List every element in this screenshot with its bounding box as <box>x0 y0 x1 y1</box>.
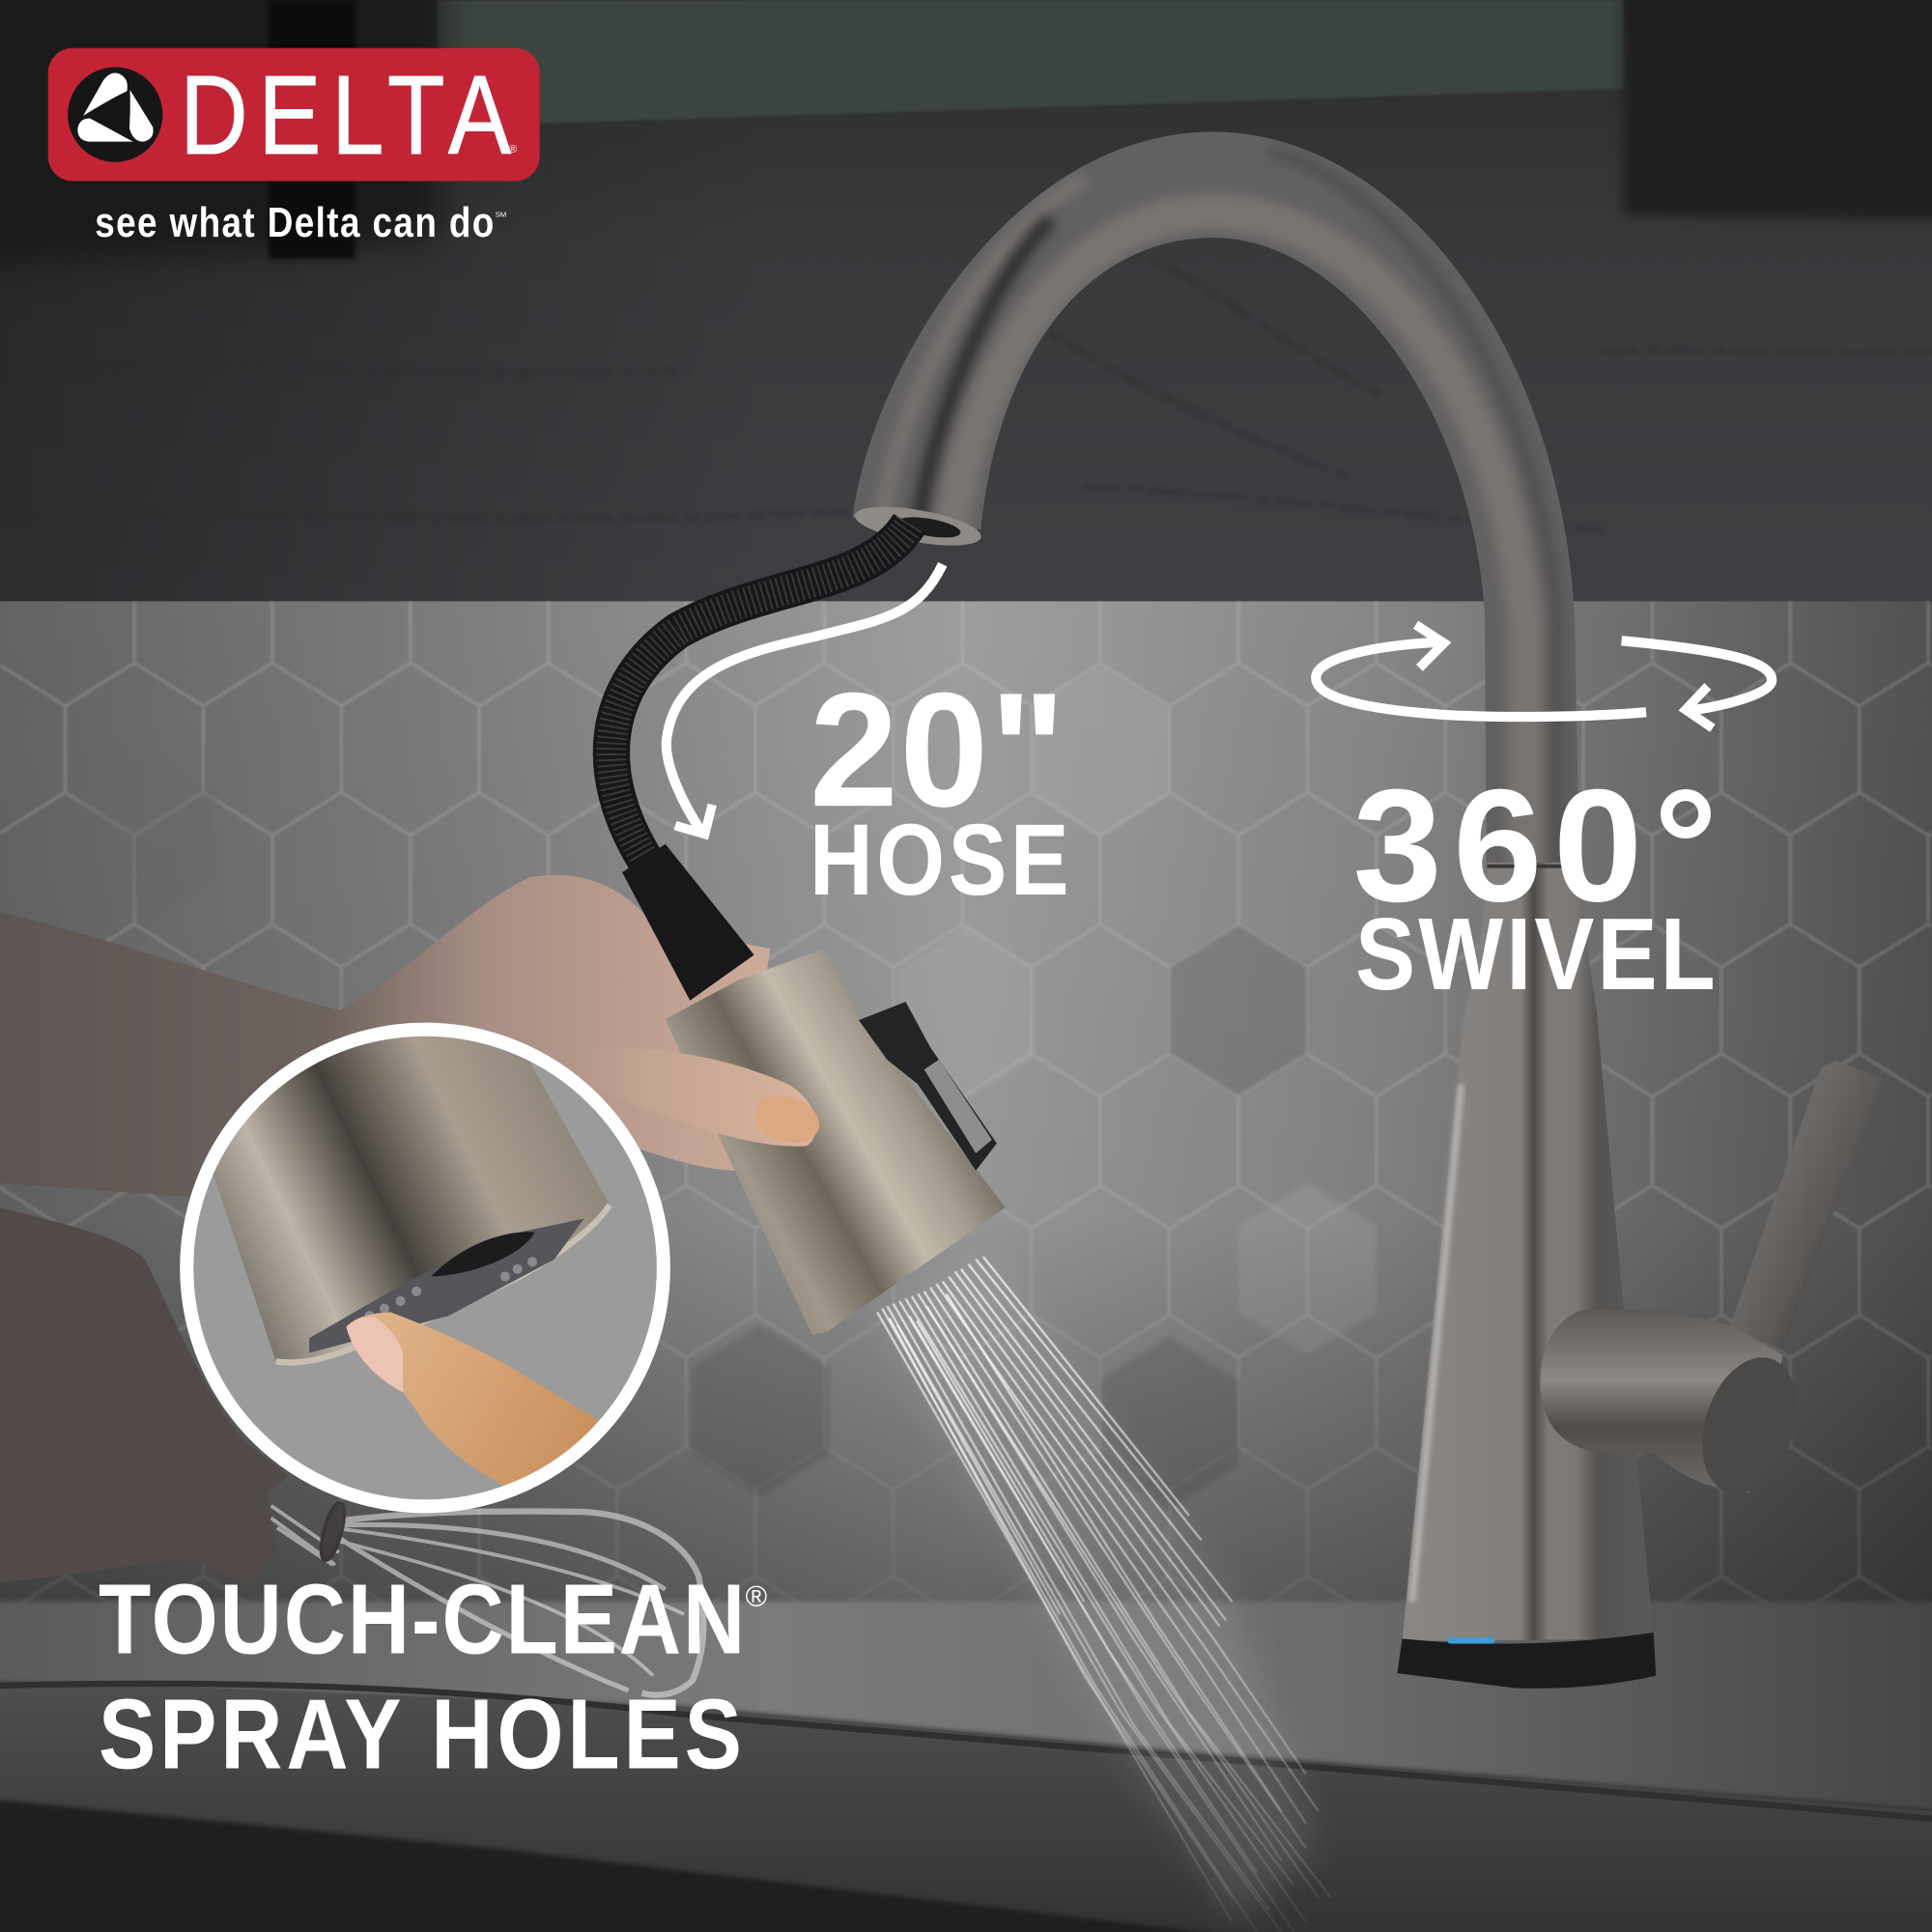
touch base <box>1397 1633 1656 1689</box>
handle <box>1540 1061 1883 1506</box>
label: touch-clean spray holes: TOUCH-CLEAN <box>99 1565 745 1675</box>
spray head <box>622 844 1006 1334</box>
fingernail <box>755 1096 819 1143</box>
upper hand holding faucet <box>0 875 770 1202</box>
tagline: SM <box>496 210 506 218</box>
logo emblem <box>68 68 162 162</box>
wood grain <box>0 222 1932 529</box>
counter <box>0 1602 1932 1811</box>
label: touch-clean spray holes: SPRAY HOLES <box>99 1679 742 1790</box>
wood cabinet band <box>0 0 1932 601</box>
faucet <box>838 124 1883 1689</box>
label: 20 inch hose: HOSE <box>810 803 1069 916</box>
gooseneck spout <box>852 131 1578 871</box>
label: touch-clean spray holes: ® <box>746 1580 768 1613</box>
label: 360 degree swivel: SWIVEL <box>1355 898 1716 1012</box>
logo <box>48 48 540 181</box>
window <box>438 0 1624 127</box>
tile wall <box>0 601 1932 1624</box>
swivel arrow <box>1316 625 1772 728</box>
hose length arrow <box>667 564 943 835</box>
whisk <box>271 1501 703 1695</box>
spray buttons <box>859 1002 997 1171</box>
sink <box>0 1682 1932 1932</box>
spout tip <box>852 499 983 553</box>
index finger <box>579 1047 816 1147</box>
label: 20 inch hose <box>810 660 1069 916</box>
body <box>1403 863 1654 1641</box>
hose <box>611 524 909 863</box>
indicator light <box>1448 1637 1494 1644</box>
water spray <box>877 1257 1331 1932</box>
nozzle cone <box>197 1029 610 1362</box>
label: 360 degree swivel: 360° <box>1353 756 1718 935</box>
spray face <box>309 1218 584 1353</box>
label: 20 inch hose: 20" <box>810 660 1065 841</box>
logo: ® <box>509 144 518 156</box>
tagline: see what Delta can do <box>95 199 494 246</box>
inset circle: touch-clean spray holes <box>186 1029 664 1507</box>
lower hand <box>0 1208 288 1587</box>
finger <box>346 1312 599 1497</box>
label: touch-clean spray holes <box>99 1565 768 1790</box>
wordmark: DELTA <box>180 52 512 178</box>
